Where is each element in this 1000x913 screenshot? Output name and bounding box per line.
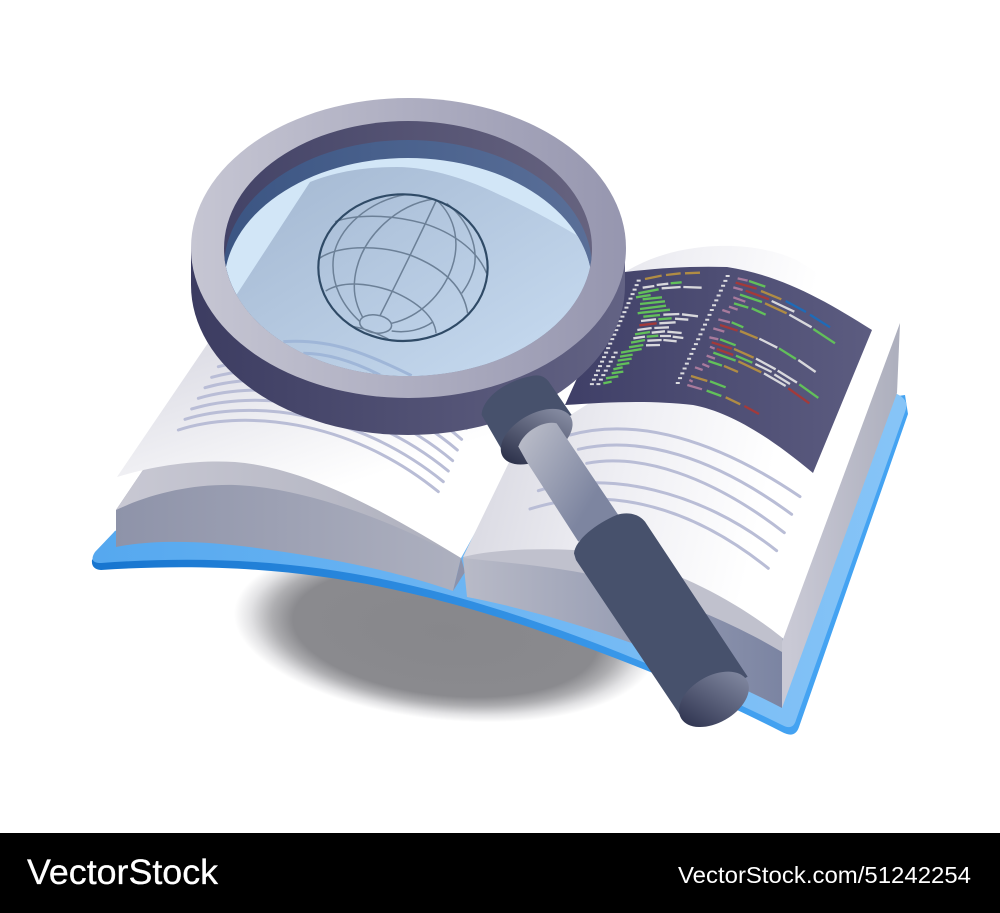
magnifying glass (191, 98, 759, 739)
code panel on right page (565, 267, 872, 473)
code lines (590, 273, 835, 414)
magnified page lines (283, 341, 412, 376)
lens reflection area (236, 167, 590, 376)
handle collar and shaft (482, 375, 618, 542)
brand name: VectorStock (27, 853, 219, 892)
left page block (116, 340, 510, 591)
ground shadow (225, 522, 665, 742)
right page block (463, 246, 900, 708)
lens rim (191, 98, 626, 435)
handle collar (482, 375, 582, 476)
page text lines (178, 359, 800, 568)
image id: VectorStock.com/51242254 (678, 862, 971, 888)
handle shaft (518, 423, 618, 542)
globe icon (318, 194, 488, 341)
footer bar (0, 833, 1000, 913)
book cover (92, 394, 908, 735)
lens interior (224, 121, 592, 376)
handle grip (574, 513, 759, 739)
book (92, 246, 908, 735)
